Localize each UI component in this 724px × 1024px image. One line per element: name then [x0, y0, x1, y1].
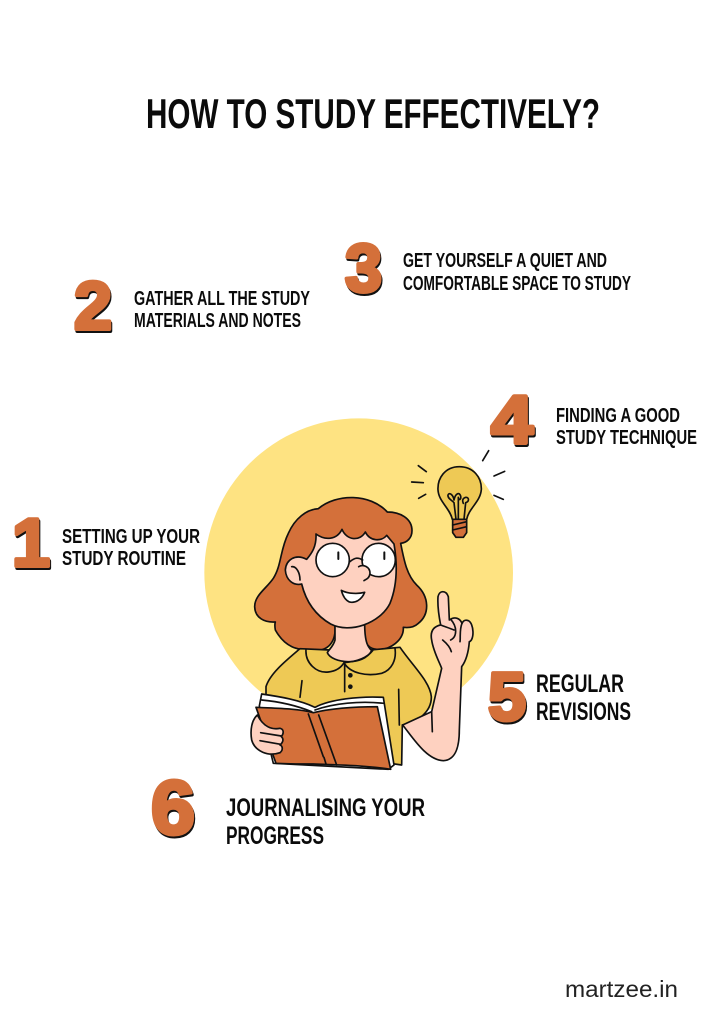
step 4 text: FINDING A GOOD	[556, 405, 680, 427]
neck	[327, 623, 372, 662]
step 6	[151, 766, 425, 851]
step 5 text: REVISIONS	[536, 698, 631, 726]
step 4	[491, 382, 697, 458]
footer website: martzee.in	[565, 976, 678, 1002]
step 2 text: MATERIALS AND NOTES	[134, 310, 301, 332]
step 2 text: GATHER ALL THE STUDY	[134, 288, 310, 310]
glasses	[316, 543, 395, 581]
shirt details	[300, 664, 399, 725]
step 3	[345, 230, 631, 306]
shirt	[266, 647, 431, 765]
number 3: 3	[345, 230, 382, 306]
step 3 text	[403, 250, 631, 295]
arm and pointing hand	[403, 592, 473, 761]
step 1 text: STUDY ROUTINE	[62, 548, 186, 570]
step 6 text: JOURNALISING YOUR	[226, 794, 425, 822]
icon: light bulb	[412, 451, 505, 537]
number 4: 4	[491, 382, 533, 458]
step 4 text	[556, 405, 697, 449]
step 1	[12, 505, 200, 581]
finger lines	[260, 733, 281, 744]
number 6: 6	[151, 766, 195, 851]
number 1: 1	[12, 505, 50, 581]
open book	[256, 694, 394, 769]
step 3 text: GET YOURSELF A QUIET AND	[403, 250, 607, 272]
step 1 text: SETTING UP YOUR	[62, 526, 200, 548]
step 1 text	[62, 526, 200, 570]
step 5 text	[536, 670, 631, 726]
left hand	[251, 715, 283, 754]
illustration: student with book and light bulb	[204, 418, 513, 769]
smile	[341, 590, 365, 602]
collar	[306, 648, 395, 675]
step 6 text	[226, 794, 425, 850]
face	[285, 529, 396, 628]
step 6 text: PROGRESS	[226, 822, 324, 850]
hair	[255, 498, 427, 651]
step 5 text: REGULAR	[536, 670, 624, 698]
step 2 text	[134, 288, 310, 332]
step 2	[74, 268, 310, 344]
yellow circle background	[204, 418, 513, 727]
step 5	[488, 659, 631, 735]
number 5: 5	[488, 659, 526, 735]
number 2: 2	[74, 268, 112, 344]
